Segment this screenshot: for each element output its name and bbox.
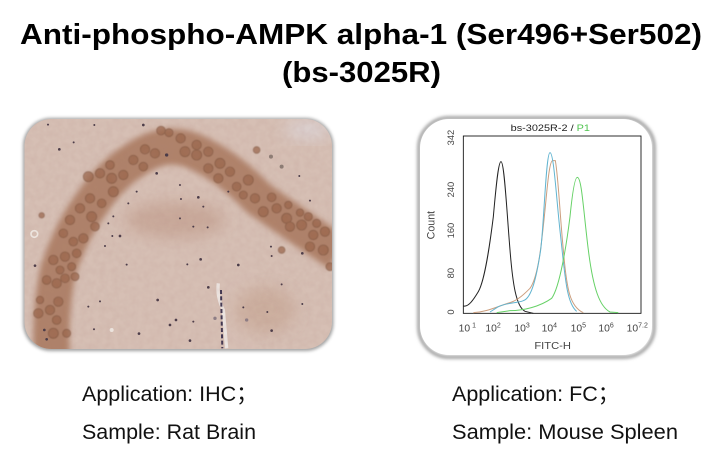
x axis labels and title: 4 [553, 323, 557, 330]
y axis labels and title: 342 [446, 130, 456, 145]
x axis labels and title: 5 [582, 323, 586, 330]
plot frame [463, 136, 641, 313]
x axis labels and title: 10 [542, 324, 553, 335]
x axis labels and title: 10 [485, 324, 497, 335]
black control curve [463, 162, 533, 313]
dark nuclei [34, 124, 311, 342]
y axis labels and title: 160 [446, 223, 456, 238]
chart title: bs-3025R-2 / P1 [511, 123, 590, 133]
caption: FC application: Sample: Mouse Spleen [452, 420, 678, 444]
caption: IHC application: Sample: Rat Brain [82, 420, 256, 444]
x axis labels and title: 6 [610, 323, 614, 330]
x axis labels and title: 10 [571, 324, 582, 335]
panel: flow cytometry histogram [419, 118, 654, 357]
stained neuron cells [34, 126, 334, 338]
green positive curve [497, 177, 618, 313]
title [20, 19, 702, 89]
x axis labels and title: 10 [598, 324, 610, 335]
caption: FC application [452, 382, 678, 444]
x axis labels and title: 10 [627, 324, 638, 335]
title: (bs-3025R) [282, 57, 441, 89]
x axis labels and title: 7.2 [638, 323, 648, 330]
x axis labels and title: 3 [526, 323, 530, 330]
x axis labels and title: FITC-H [534, 341, 571, 352]
orange isotype curve [473, 161, 583, 313]
x axis labels and title: 1 [470, 323, 476, 330]
tissue band of stained neurons [51, 120, 338, 357]
blue sample curve [490, 153, 577, 312]
y axis labels and title: Count [426, 211, 438, 239]
title: Anti-phospho-AMPK alpha-1 (Ser496+Ser502) [20, 19, 702, 51]
caption: IHC application: Application: IHC； [82, 382, 258, 406]
y axis labels and title [426, 130, 456, 315]
x axis labels and title: 10 [514, 324, 526, 335]
x axis labels and title: 2 [497, 323, 501, 330]
y axis labels and title: 240 [446, 182, 456, 197]
caption: IHC application [82, 382, 258, 444]
caption: FC application: Application: FC； [452, 382, 619, 406]
y axis labels and title: 0 [446, 309, 456, 315]
y axis labels and title: 80 [446, 268, 456, 278]
x axis labels and title [459, 323, 648, 352]
pale vessel [31, 231, 227, 348]
panel: IHC micrograph of rat brain [23, 118, 338, 357]
x axis labels and title: 10 [459, 324, 470, 335]
